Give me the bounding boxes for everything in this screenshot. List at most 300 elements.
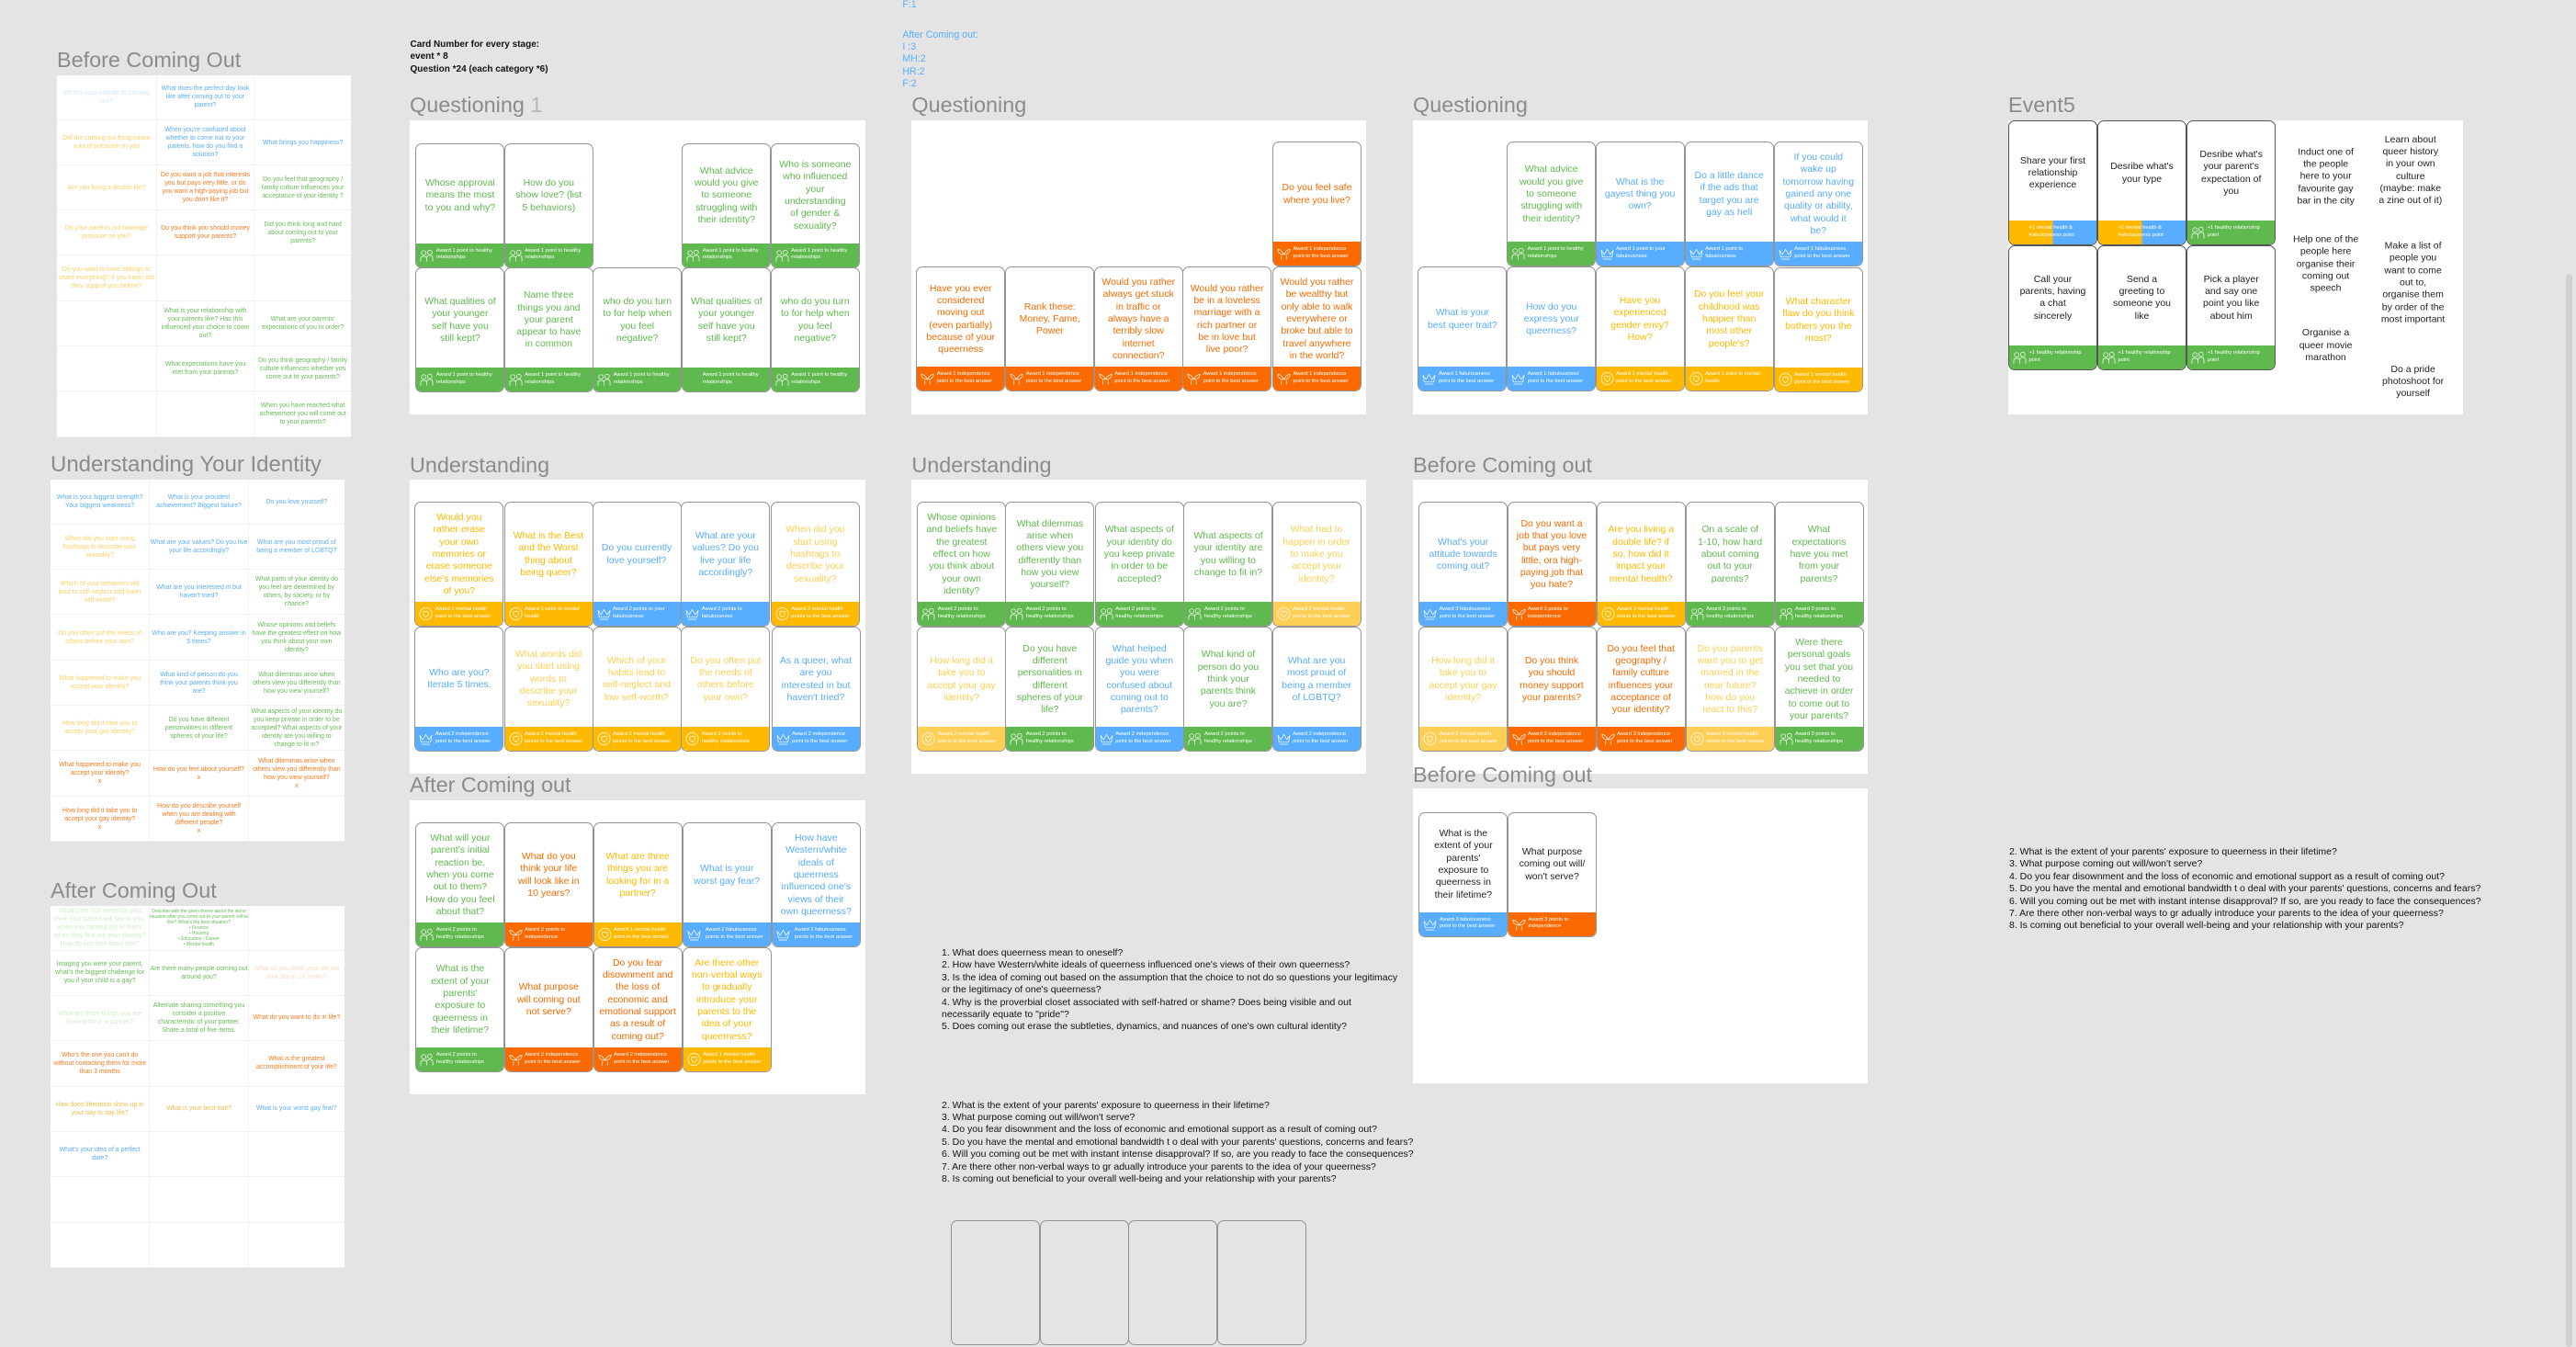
card: traffic or internet: internet xyxy=(1123,338,1155,349)
card: love yourself: Do you currently xyxy=(602,542,672,553)
card: pick a player: +1 healthy relationship xyxy=(2208,350,2260,356)
table: before coming out question bank: parents, how do you find a xyxy=(168,143,243,150)
card: get married: want you to get xyxy=(1698,655,1763,666)
card: turn to for help: negative? xyxy=(616,333,658,344)
card: non-verbal ways: parents to the xyxy=(697,1006,756,1017)
card: happier childhood: health xyxy=(1705,379,1720,384)
card: three things in common: things you and xyxy=(517,301,580,312)
card: how long: Award 2 mental health xyxy=(938,731,989,737)
card: feel safe: Do you feel safe xyxy=(1282,182,1351,193)
card: whose approval: Whose approval xyxy=(425,177,495,188)
card: erase memories: erase someone xyxy=(426,560,492,572)
card: little dance: target you are xyxy=(1700,195,1759,206)
card: best and worst: and the Worst xyxy=(518,542,579,553)
card: turn to for help 2: to for help when xyxy=(781,308,850,319)
card: what helped guide you: coming out to xyxy=(1111,692,1169,703)
table: understanding your identity question bank: What happened to make you xyxy=(59,675,141,682)
card: express queerness xyxy=(1507,266,1596,391)
table: before coming out question bank: Do you want to have siblings to xyxy=(62,266,151,273)
card: get married: Award 3 mental health xyxy=(1706,731,1758,737)
card: gayest thing xyxy=(1596,141,1685,266)
table: understanding your identity question bank: 5 times? xyxy=(186,639,211,645)
card: accept your identity: accept your xyxy=(1292,560,1341,572)
card: scale of 1-10: healthy relationships xyxy=(1706,614,1754,619)
card: needs of others: Do you often put xyxy=(690,655,761,666)
text block: parent questions, right copy: 7. Are there other non-verbal ways to gr adually introduce your parents to the idea of your queerness? xyxy=(2009,908,2444,919)
text: movie marathon: marathon xyxy=(2305,352,2346,363)
table: understanding your identity question bank: What dilemmas arise when xyxy=(258,758,334,764)
card: little dance: Award 1 point to xyxy=(1705,246,1743,252)
card: scale of 1-10: out to your xyxy=(1707,560,1753,572)
card: call your parents: a chat xyxy=(2039,298,2066,309)
card: western ideals: points to the best answer xyxy=(795,934,853,940)
card: wake up tomorrow: wake up xyxy=(1801,164,1836,175)
panel: understanding cards 2 xyxy=(911,480,1366,774)
card: feel safe: point to the best answer xyxy=(1293,254,1349,259)
panel: before coming out cards xyxy=(1413,480,1868,774)
card: most proud: Award 2 independence xyxy=(1293,731,1346,737)
card: western ideals: Western/white xyxy=(785,844,846,855)
card: attitude: Award 3 fabulousness xyxy=(1440,606,1490,612)
card: first relationship: experience xyxy=(2029,179,2076,190)
card: worst gay fear: Award 2 fabulousness xyxy=(706,927,757,933)
card: wealthy or broke: only able to walk xyxy=(1282,301,1352,312)
card: moving out: point to the best answer xyxy=(937,379,992,384)
card: three things in common: your parent xyxy=(525,314,573,325)
card: how long: accept your gay xyxy=(928,680,996,691)
card: job you love: paying job that xyxy=(1520,567,1583,578)
card: change to fit in: you willing to xyxy=(1201,555,1256,566)
card: qualities of younger self: still kept? xyxy=(440,333,480,344)
card: show love xyxy=(504,143,593,268)
card: opinions and beliefs: identity? xyxy=(943,585,979,596)
table: before coming out question bank: whether to come out to your xyxy=(165,135,244,141)
card: turn to for help: you feel xyxy=(620,320,654,331)
card: dilemmas: others view you xyxy=(1016,542,1083,553)
text: queer history xyxy=(2378,134,2442,206)
card: loveless marriage: point to the best answer xyxy=(1203,379,1259,384)
panel: questioning 1 cards xyxy=(410,120,865,414)
card: different personalities xyxy=(1005,627,1094,752)
card: influenced understanding: understanding xyxy=(785,196,846,207)
card: wealthy or broke: travel anywhere xyxy=(1282,338,1351,349)
card: wake up tomorrow: be? xyxy=(1811,225,1826,236)
table: understanding your identity question bank: accepted? What aspects of your xyxy=(251,725,342,731)
card: happier childhood: childhood was xyxy=(1699,301,1759,312)
card: exposure to queerness: queerness in xyxy=(433,1013,488,1024)
table: after coming out question bank: think your parent will say to you, xyxy=(54,916,145,923)
card: hashtags: describe your xyxy=(786,560,844,572)
table: before coming out question bank: a lot of pressure on you xyxy=(73,143,140,150)
table: understanding your identity question bank: accept your gay identity? xyxy=(64,729,135,735)
card: values xyxy=(681,502,770,627)
card: moving out: queerness xyxy=(938,344,983,355)
card: needs of others: others before xyxy=(697,679,754,690)
text block: parent questions: 5. Do you have the mental and emotional bandwidth t o deal with your parents' questions, concerns and fears? xyxy=(942,1137,1413,1148)
card: loveless marriage: be in love but xyxy=(1198,332,1256,343)
table: understanding your identity question bank: Do you love yourself? xyxy=(266,499,327,505)
card: show love: show love? (list xyxy=(515,189,582,200)
card: purpose: will coming out xyxy=(517,994,581,1005)
table: before coming out question bank: you don't like it? xyxy=(183,197,228,203)
card: advice: to someone xyxy=(701,189,751,200)
card: show love: relationships xyxy=(525,255,554,260)
card: your type: Fabulousness point xyxy=(2118,232,2164,238)
table: before coming out question bank: When you have reached what xyxy=(261,402,345,409)
card: needs of others: healthy relationships xyxy=(702,739,750,744)
table: understanding your identity question bank: you keep private in order to be xyxy=(254,717,340,723)
card: moving out: because of your xyxy=(926,332,995,343)
card: turn to for help 2: negative? xyxy=(795,333,836,344)
card: habits: Which of your xyxy=(607,655,666,666)
card: expectations: from your xyxy=(1799,560,1839,572)
table: before coming out question bank: When you're confused about xyxy=(164,127,246,133)
card: dilemmas: What dilemmas xyxy=(1017,518,1083,529)
table: before coming out question bank: out? xyxy=(100,98,113,105)
table: before coming out question bank: What does the perfect day look xyxy=(162,85,249,92)
card: disownment: point to the best answer xyxy=(614,1059,669,1065)
card: opinions and beliefs: Award 2 points to xyxy=(938,606,978,612)
table: understanding your identity question bank: chance? xyxy=(285,601,309,607)
card: qualities of younger self, no icon: Award 1 point to healthy xyxy=(703,372,759,378)
card: whose approval: relationships xyxy=(436,255,466,260)
card: habits: Award 2 mental health xyxy=(613,731,665,737)
table: before coming out question bank: What brings you happiness? xyxy=(263,140,343,146)
card: influenced understanding: Award 1 point to healthy xyxy=(791,248,847,254)
card: loveless marriage: live poor? xyxy=(1206,344,1248,355)
text: queer history: in your own xyxy=(2386,158,2435,169)
note: after coming out category counts: F:2 xyxy=(902,78,917,89)
card: western ideals: How have xyxy=(795,832,838,843)
card: values: live your life xyxy=(700,555,751,566)
card: words: words to xyxy=(530,674,567,685)
card: expectations xyxy=(1775,502,1863,627)
card: disownment: emotional support xyxy=(599,1006,676,1017)
table: after coming out question bank: date? xyxy=(92,1155,107,1161)
table: after coming out question bank: around you? xyxy=(181,974,217,980)
card: show love: Award 1 point to healthy xyxy=(525,248,581,254)
card: send a greeting: like xyxy=(2135,311,2149,322)
card: exposure to queerness: extent of your xyxy=(431,976,490,987)
card: parent's expectation: your parent's xyxy=(2203,161,2259,172)
card: wealthy or broke: everywhere or xyxy=(1286,313,1348,324)
card: hashtags: points to the best answer xyxy=(791,614,850,619)
text: pride photoshoot: Do a pride xyxy=(2390,364,2435,375)
card: advice: would you give xyxy=(1520,176,1583,187)
card: non-verbal ways: Are there other xyxy=(695,957,759,968)
note: after coming out category counts: After Coming out: xyxy=(902,29,978,40)
card: three things in common: Name three xyxy=(524,289,574,300)
card: initial reaction: reaction be, xyxy=(435,857,485,868)
table: after coming out question bank: consider a positive xyxy=(173,1011,225,1017)
card: what helped guide you: Award 2 independence xyxy=(1115,731,1169,737)
card: show love: How do you xyxy=(524,177,574,188)
card: scale of 1-10: about coming xyxy=(1701,549,1759,560)
card: wealthy or broke: point to the best answer xyxy=(1293,379,1349,384)
card: turn to for help: who do you turn xyxy=(603,296,672,307)
table: understanding your identity question bank: have the greatest effect on how xyxy=(252,630,341,637)
card: advice: to someone xyxy=(1526,188,1576,199)
card: personal goals xyxy=(1775,627,1863,752)
card: how long: How long did it xyxy=(930,655,993,666)
text: movie marathon xyxy=(2299,327,2352,363)
card: hashtags: When did you xyxy=(785,524,844,535)
card: most proud: What are you xyxy=(1288,655,1345,666)
card: initial reaction: How do you feel xyxy=(425,894,495,905)
card: character flaw: Award 1 mental health xyxy=(1794,372,1847,378)
table: understanding your identity question bank: What are you most proud of xyxy=(257,539,336,546)
card: kind of person: parents think xyxy=(1201,685,1256,696)
text block: parent questions: 2. What is the extent of your parents' exposure to queerness in their lifetime? xyxy=(942,1099,1270,1110)
table: after coming out question bank: accomplishment of your life? xyxy=(256,1064,337,1070)
table: understanding your identity question bank: self-worth? xyxy=(85,597,116,604)
card: exposure to queerness: their lifetime? xyxy=(432,1024,489,1036)
text block: parent questions, right copy: 8. Is coming out beneficial to your overall well-being and your relationship with your parents? xyxy=(2009,920,2404,931)
card: qualities of younger self xyxy=(415,267,504,392)
card: worst gay fear xyxy=(683,822,772,947)
text block: parent questions, right copy: 6. Will you coming out be met with instant intense disapproval? If so, are you ready to face the consequences? xyxy=(2009,896,2481,907)
table: understanding your identity question bank: accept your identity? xyxy=(71,770,129,776)
card: job you love: Award 3 points to xyxy=(1528,606,1568,612)
table: after coming out question bank xyxy=(51,906,345,1268)
card: dilemmas: Award 2 points to xyxy=(1026,606,1067,612)
card: exposure to queerness: extent of your xyxy=(1434,840,1493,851)
table: after coming out question bank: How do you feel about that? xyxy=(60,941,140,947)
card: purpose of coming out xyxy=(1508,812,1597,937)
card: call your parents: sincerely xyxy=(2034,311,2072,322)
card: habits: habits lead to xyxy=(608,667,665,678)
card: personal goals: needed to xyxy=(1798,674,1840,685)
card: keep private: in order to be xyxy=(1111,560,1168,572)
card: send a greeting: Send a xyxy=(2127,274,2157,285)
table: understanding your identity question bank: you think about your own xyxy=(261,639,332,645)
card: initial reaction: about that? xyxy=(436,906,484,917)
table: understanding your identity question bank: What are you interested in but xyxy=(156,584,242,591)
card: expectations: have you met xyxy=(1790,549,1848,560)
heading: questioning 3: Questioning xyxy=(1413,93,1528,117)
table: after coming out question bank: How does liberation show up in xyxy=(56,1102,144,1108)
card: dilemmas xyxy=(1005,502,1094,627)
text block: queerness questions: necessarily equate to "pride"? xyxy=(942,1009,1069,1020)
card: wake up tomorrow: what would it xyxy=(1791,213,1847,224)
card: happier childhood: Award 1 point to mental xyxy=(1705,371,1760,377)
table: understanding your identity question bank: x xyxy=(295,783,299,789)
card: little dance: Do a little dance xyxy=(1695,170,1764,181)
card: first relationship: +1 mental health & xyxy=(2028,225,2073,231)
card: best and worst: What is the Best xyxy=(514,530,583,541)
text: induct xyxy=(2297,146,2355,207)
card: accept your identity: identity? xyxy=(1299,573,1335,584)
table: understanding your identity question bank: How long did it take you to xyxy=(62,720,137,727)
card: geography: influences your xyxy=(1609,680,1673,691)
card: purpose of coming out: won't serve? xyxy=(1525,871,1579,882)
card: gayest thing: Award 1 point to your xyxy=(1616,246,1666,252)
text block: parent questions xyxy=(942,1099,1414,1184)
table: before coming out question bank: about coming out to your xyxy=(267,230,338,236)
table: understanding your identity question bank: Your biggest weakness? xyxy=(65,503,134,509)
card: personal goals: achieve in order xyxy=(1785,685,1853,696)
card: love yourself xyxy=(592,502,682,627)
card: purpose of coming out: What purpose xyxy=(1522,846,1582,857)
card: character flaw: point to the best answer xyxy=(1794,379,1850,385)
card: kind of person: you are? xyxy=(1210,698,1247,709)
card: keep private: What aspects of xyxy=(1105,524,1174,535)
table: after coming out question bank: what's the biggest challenge for xyxy=(55,969,144,976)
card: exposure to queerness: parents' xyxy=(1446,853,1480,864)
card: different personalities: personalities in xyxy=(1018,667,1082,678)
card: parent's expectation xyxy=(2186,120,2276,245)
card: get married xyxy=(1686,627,1775,752)
card: disownment: coming out? xyxy=(611,1031,664,1042)
card: character flaw: What character xyxy=(1786,296,1851,307)
table: understanding your identity question bank: Whose opinions and beliefs xyxy=(257,622,335,628)
table: before coming out question bank: out? xyxy=(199,333,211,339)
card: advice: relationships xyxy=(1528,254,1557,259)
card: traffic or internet: Award 1 independence xyxy=(1114,371,1168,377)
table: before coming out question bank: Do you think you should money xyxy=(161,225,250,232)
card: double life: mental health? xyxy=(1610,573,1673,584)
card: advice: What advice xyxy=(1525,164,1578,175)
card: advice: struggling with xyxy=(695,202,757,213)
card: hashtags: Award 2 mental health xyxy=(791,606,843,612)
card: double life: points to the best answer xyxy=(1617,614,1675,619)
card: traffic or internet: point to the best answer xyxy=(1114,379,1170,384)
table: understanding your identity question bank: What parts of your identity do xyxy=(255,576,338,583)
card: values: fabulousness xyxy=(702,614,732,619)
card: values: Award 2 points to xyxy=(702,606,742,612)
card: values: What are your xyxy=(695,530,756,541)
table: understanding your identity question bank: What dilemmas arise when xyxy=(258,672,334,678)
panel: questioning independence cards xyxy=(911,120,1366,414)
card: your type xyxy=(2097,120,2186,245)
card: erase memories: Would you xyxy=(436,512,481,523)
card: most proud xyxy=(1272,627,1361,752)
card: best and worst: health xyxy=(525,614,538,619)
card: opinions and beliefs: effect on how xyxy=(933,549,990,560)
table: after coming out question bank: than 3 months xyxy=(80,1069,120,1075)
card: western ideals: ideals of xyxy=(798,857,834,868)
card: double life: double life? if xyxy=(1612,537,1669,548)
card: words: describe your xyxy=(519,685,578,696)
card: send a greeting xyxy=(2097,245,2186,370)
card: advice: their identity? xyxy=(1522,213,1580,224)
card: scale of 1-10 xyxy=(1686,502,1775,627)
card: attitude xyxy=(1418,502,1508,627)
card: influenced understanding: who influenced xyxy=(783,171,847,182)
text: make a list xyxy=(2381,240,2446,324)
card: pick a player: point you like xyxy=(2203,298,2259,309)
table: understanding your identity question bank: how you view yourself? xyxy=(264,775,330,781)
card: opinions and beliefs xyxy=(917,502,1006,627)
table: understanding your identity question bank: identity are you willing to xyxy=(262,733,332,740)
card: disownment: disownment and xyxy=(603,969,672,980)
card: words: points to the best answer xyxy=(525,739,582,744)
table: before coming out question bank: they support you before? xyxy=(71,283,141,289)
panel: after coming out cards xyxy=(410,800,865,1094)
card: qualities of younger self, no icon: What qualities of xyxy=(691,296,763,307)
card: character flaw: flaw do you think xyxy=(1782,308,1854,319)
card: what helped guide you: point to the best answer xyxy=(1115,739,1171,744)
card: gender envy: gender envy? xyxy=(1610,320,1669,331)
card: parent's expectation: expectation of xyxy=(2201,173,2261,184)
card: interested in: are you xyxy=(799,667,832,678)
card: dilemmas: healthy relationships xyxy=(1026,614,1074,619)
card: attitude: attitude towards xyxy=(1429,549,1497,560)
card: hashtags: sexuality? xyxy=(794,573,837,584)
card: how long: identity? xyxy=(1445,692,1481,703)
card: expectations: Award 3 points to xyxy=(1795,606,1836,612)
card: pick a player xyxy=(2186,245,2276,370)
table: understanding your identity question bank: different people? xyxy=(175,820,222,826)
card: western ideals: influenced one's xyxy=(782,881,851,892)
table: understanding your identity question bank: change to fit in? xyxy=(274,741,319,748)
table: after coming out question bank: Alternate sharing something you xyxy=(153,1002,244,1009)
card: send a greeting: greeting to xyxy=(2119,286,2164,297)
text: help organise speech xyxy=(2293,234,2358,294)
card: scale of 1-10: On a scale of xyxy=(1701,524,1758,535)
card: call your parents: parents, having xyxy=(2020,286,2085,297)
card: first relationship xyxy=(2008,120,2097,245)
card: influenced understanding xyxy=(771,143,860,268)
card: character flaw: most? xyxy=(1805,333,1832,344)
card: money support: money support xyxy=(1520,680,1584,691)
card: most proud: point to the best answer xyxy=(1293,739,1348,744)
card: advice xyxy=(682,143,771,268)
card: qualities of younger self: your younger xyxy=(432,308,489,319)
card: interested in: As a queer, what xyxy=(780,655,852,666)
card: expectations: expectations xyxy=(1791,537,1846,548)
table: understanding your identity question bank: x xyxy=(98,778,101,785)
table: before coming out question bank: expectations of you in order? xyxy=(262,324,344,331)
card: influenced understanding: relationships xyxy=(791,255,820,260)
table: before coming out question bank: What is your relationship with xyxy=(164,308,247,314)
card: call your parents: +1 healthy relationship xyxy=(2028,350,2082,356)
text: make a list: want to come xyxy=(2384,265,2442,276)
card: purpose of coming out: coming out will/ xyxy=(1520,858,1585,869)
card: exposure to queerness: their lifetime? xyxy=(1435,889,1492,900)
card: keep private: accepted? xyxy=(1117,573,1162,584)
card: western ideals: own queerness? xyxy=(781,906,852,917)
card: initial reaction: Award 2 points to xyxy=(436,927,477,933)
card: rank these: Power xyxy=(1036,325,1064,336)
card: money support: Do you think xyxy=(1525,655,1578,666)
card: erase memories xyxy=(414,502,503,627)
card: non-verbal ways: non-verbal ways xyxy=(692,969,762,980)
card: dilemmas: yourself? xyxy=(1030,579,1069,590)
card: exposure to queerness: What is the xyxy=(1440,828,1487,839)
card: gayest thing: own? xyxy=(1629,200,1652,211)
card: advice: Award 1 point to healthy xyxy=(703,248,759,254)
table: understanding your identity question bank: x xyxy=(98,824,101,831)
card: purpose xyxy=(504,947,593,1072)
card: influenced understanding: your xyxy=(806,184,825,195)
table: understanding your identity question bank: What is your proudest xyxy=(168,494,230,501)
card: influenced understanding: Who is someone xyxy=(779,159,851,170)
card: initial reaction xyxy=(415,822,504,947)
card: erase memories: Award 1 mental health xyxy=(435,606,487,612)
card: what helped guide you: What helped xyxy=(1113,643,1167,654)
card: personal goals: Award 3 points to xyxy=(1795,731,1836,737)
card: turn to for help: Award 1 point to healthy xyxy=(614,372,670,378)
card: wake up tomorrow: If you could xyxy=(1793,152,1843,163)
card: get married: points to the best answer xyxy=(1706,739,1764,744)
table: after coming out question bank: when they find out your identity? xyxy=(54,933,145,939)
table: understanding your identity question bank: when you are dealing with xyxy=(162,811,236,818)
card: three things in partner: What are three xyxy=(605,851,670,862)
card: get married: react to this? xyxy=(1702,704,1757,715)
card: western ideals: views of their xyxy=(788,894,844,905)
table: after coming out question bank: Are there many people coming out xyxy=(150,966,248,972)
